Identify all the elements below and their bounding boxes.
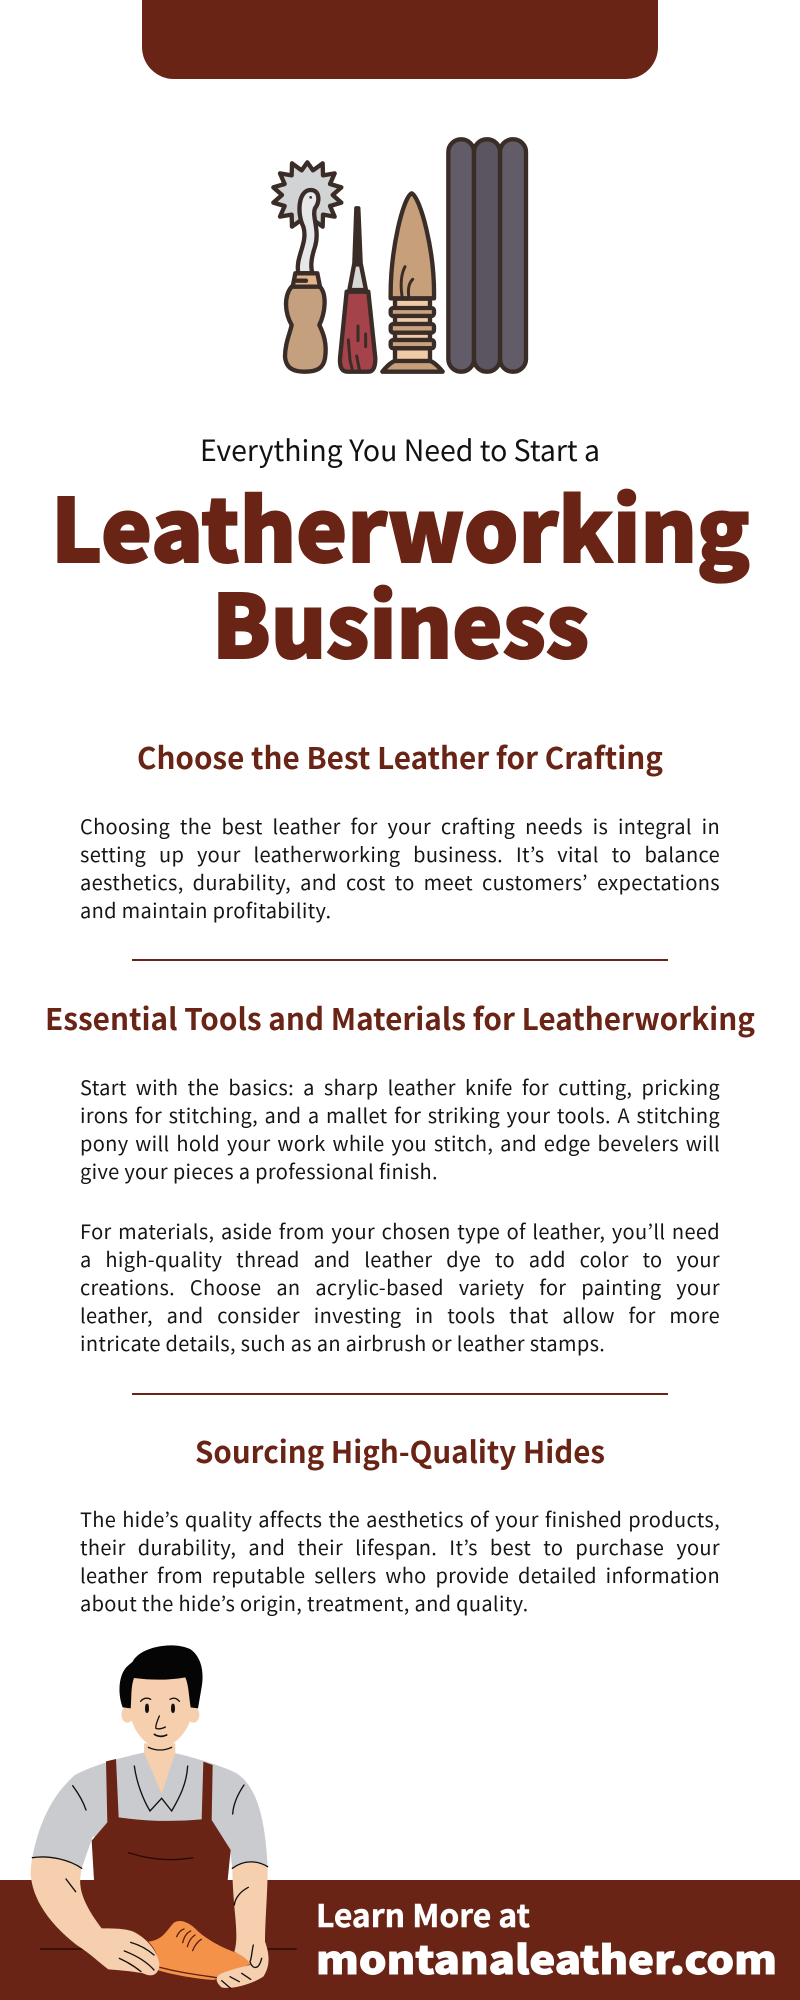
paragraph: sourcing hides	[80, 1504, 720, 1617]
face	[131, 1673, 191, 1748]
paragraph: choosing leather	[80, 811, 720, 924]
neck	[144, 1743, 175, 1794]
icon: leather tools	[271, 137, 528, 374]
title and headings	[45, 428, 755, 1472]
website: montanaleather.com	[316, 1930, 777, 1986]
paragraph: materials: For materials, aside from your chosen type of leather, you’ll need	[80, 1216, 720, 1245]
arms and hands	[31, 1857, 269, 1988]
paragraph: sourcing hides: leather from reputable sellers who provide detailed information	[80, 1560, 720, 1589]
paragraph: materials: intricate details, such as an airbrush or leather stamps.	[80, 1328, 605, 1357]
paragraph: materials: creations. Choose an acrylic-based variety for painting your	[80, 1272, 720, 1301]
paragraph: basic tools: pony will hold your work while you stitch, and edge bevelers will	[80, 1128, 720, 1157]
paragraph: choosing leather: aesthetics, durability, and cost to meet customers’ expectations	[80, 867, 720, 896]
apron	[92, 1759, 233, 1947]
paragraph: basic tools: irons for stitching, and a mallet for striking your tools. A stitching	[80, 1100, 720, 1129]
main title	[51, 462, 750, 684]
paragraph: choosing leather: and maintain profitability.	[80, 895, 331, 924]
paragraph: sourcing hides: The hide’s quality affects the aesthetics of your finished products,	[80, 1504, 720, 1533]
subtitle: Everything You Need to Start a	[200, 428, 600, 470]
main title: Business	[212, 558, 589, 684]
paragraph: sourcing hides: about the hide’s origin, treatment, and quality.	[80, 1588, 529, 1617]
paragraph: materials	[80, 1216, 720, 1357]
paragraph: choosing leather: Choosing the best leather for your crafting needs is integral in	[80, 811, 720, 840]
heading: sourcing hides: Sourcing High-Quality Hides	[195, 1428, 605, 1472]
table line	[40, 1947, 297, 1951]
footer call to action	[316, 1891, 777, 1986]
icon: dowels	[448, 139, 526, 372]
icon: burnisher	[382, 193, 443, 372]
heading: choose leather: Choose the Best Leather for Crafting	[137, 734, 663, 778]
paragraph: sourcing hides: their durability, and their lifespan. It’s best to purchase your	[80, 1532, 720, 1561]
shirt	[32, 1753, 268, 1868]
paragraph: materials: a high-quality thread and leather dye to add color to your	[80, 1244, 720, 1273]
paragraph: choosing leather: setting up your leatherworking business. It’s vital to balance	[80, 839, 720, 868]
learn more label: Learn More at	[316, 1891, 530, 1936]
arm and finger lines	[32, 1857, 268, 1988]
heading: essential tools: Essential Tools and Materials for Leatherworking	[45, 995, 755, 1039]
paragraph: materials: leather, and consider investing in tools that allow for more	[80, 1300, 720, 1329]
footer band	[0, 1880, 800, 2000]
main title: Leatherworking	[51, 462, 750, 588]
illustration: leatherworker holding shoe	[30, 1645, 297, 1989]
icon: tracing wheel	[273, 162, 341, 372]
icon: awl	[340, 208, 375, 372]
ears	[121, 1707, 199, 1723]
top banner	[142, 0, 658, 79]
shoe	[148, 1921, 250, 1980]
shirt lines	[73, 1766, 244, 1860]
paragraph: basic tools: give your pieces a professional finish.	[80, 1156, 438, 1185]
facial features	[141, 1698, 179, 1750]
hair	[119, 1645, 203, 1708]
paragraph: basic tools	[80, 1072, 720, 1185]
paragraph: basic tools: Start with the basics: a sharp leather knife for cutting, pricking	[80, 1072, 720, 1101]
